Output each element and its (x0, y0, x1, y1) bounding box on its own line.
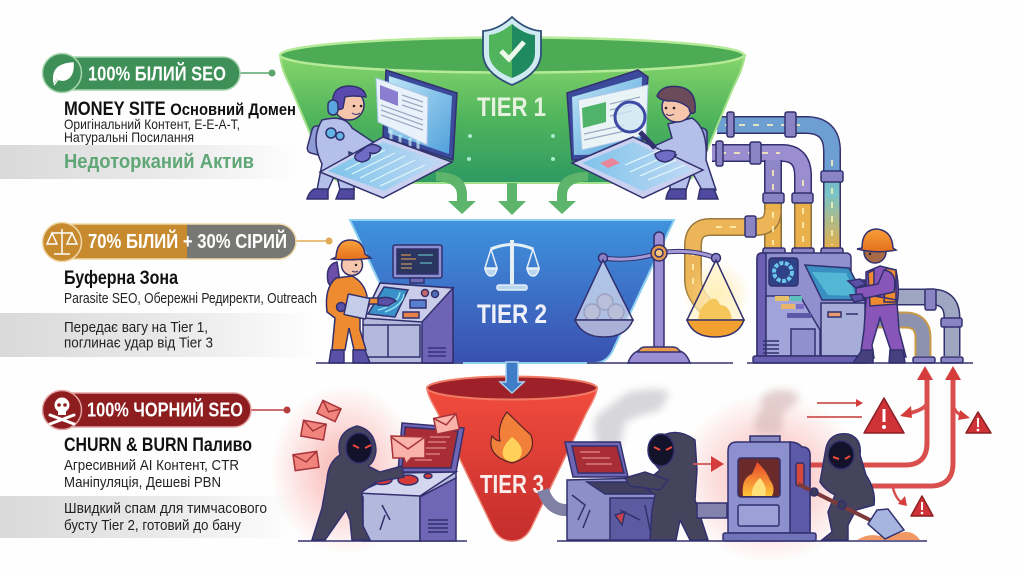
warning triangles (864, 398, 991, 516)
role tier 2: Передає вагу на Tier 1, (64, 319, 208, 336)
green flow arrows (436, 172, 588, 215)
console (363, 245, 453, 363)
untouched asset text: Недоторканий Актив (64, 151, 254, 173)
male engineer (848, 229, 906, 363)
ground lines (298, 363, 973, 541)
lower pipes from machine (878, 289, 963, 363)
furnace smoke (754, 390, 800, 435)
pipes from tier 1 to the control machine (693, 112, 843, 312)
red badge: 100% ЧОРНИЙ SEO (87, 398, 243, 422)
right astronaut hand (655, 150, 675, 162)
amber and gray badge (42, 222, 332, 262)
machine (753, 248, 868, 363)
tier 3 title: TIER 3 (480, 469, 544, 499)
tier 1 title: TIER 1 (477, 92, 546, 122)
role tier 3: Швидкий спам для тимчасового (64, 500, 267, 517)
panel: tier 3 funnel (427, 376, 597, 541)
role tier 3: бусту Tier 2, готовий до бану (64, 517, 241, 534)
blue arrow into tier 3 (500, 362, 524, 393)
shovel (798, 484, 904, 539)
gray band tier 3 (0, 496, 300, 538)
amber and gray badge: 70% БІЛИЙ + 30% СІРИЙ (88, 229, 287, 253)
heading buffer zone: Буферна Зона (64, 268, 178, 289)
description tier 3: Агресивний AI Контент, CTR (64, 457, 239, 474)
left astronaut hands (355, 144, 381, 162)
woman engineer (326, 240, 396, 363)
green badge 100% white SEO: 100% БІЛИЙ SEO (88, 62, 226, 86)
description tier 3 (64, 457, 239, 491)
icon: shield with check (483, 17, 541, 85)
description tier 1 (64, 116, 240, 145)
magnifier (615, 102, 655, 148)
tier 2 title: TIER 2 (477, 299, 547, 329)
embers (857, 531, 920, 540)
red glows (270, 385, 865, 563)
icon: small scales (485, 240, 539, 290)
red arrow heads (711, 366, 970, 506)
green badge 100% white SEO (42, 54, 276, 92)
panel: tier 2 funnel (350, 220, 674, 363)
description tier 1: Оригінальний Контент, E-E-A-T, (64, 116, 240, 132)
red badge (42, 390, 290, 430)
right laptop (567, 70, 703, 198)
broken workstation (565, 442, 667, 540)
hacker 3 (820, 434, 874, 540)
illustration: control machine with engineer (753, 229, 963, 363)
role tier 2 (64, 319, 213, 352)
spam console (357, 423, 464, 541)
red pipeline arrows (693, 374, 966, 504)
role tier 3 (64, 500, 267, 534)
panel: tier 2 label block (0, 222, 332, 357)
smoke from laptop (594, 389, 670, 455)
left laptop (320, 70, 457, 198)
large warning triangle (864, 398, 904, 433)
description tier 1: Натуральні Посилання (64, 129, 194, 145)
illustration: big balance scale (575, 232, 750, 363)
connecting pipe (697, 503, 727, 518)
illustration: hacker with burning laptop (543, 389, 708, 540)
small data sparks (467, 134, 555, 161)
description tier 2: Parasite SEO, Обережні Редиректи, Outreach (64, 290, 317, 307)
left astronaut figure (306, 86, 376, 199)
envelopes near console (391, 414, 459, 464)
icon: flame (491, 412, 532, 463)
spam envelopes flying left (293, 400, 341, 471)
gray band tier 2 (0, 313, 325, 357)
description tier 3: Маніпуляція, Дешеві PBN (64, 474, 221, 491)
hacker 1 (312, 426, 404, 540)
heading money site: MONEY SITE Основний Домен (64, 99, 296, 120)
hacker 2 (625, 432, 708, 540)
illustration: hacker with spam console (293, 400, 464, 541)
tier 2 to tier 3 flow arrow base (427, 362, 597, 541)
lower warning triangle (911, 496, 933, 516)
illustration: furnace (697, 390, 816, 541)
connecting tube (543, 490, 570, 510)
gray band tier 1 (0, 145, 305, 179)
left pan with gears (575, 260, 633, 337)
panel: tier 3 label block (0, 390, 300, 538)
panel: tier 1 funnel (280, 38, 745, 183)
illustration: engineer at control console (326, 240, 453, 363)
right warning triangle (966, 412, 991, 433)
right pan with liquid gold (687, 260, 744, 337)
right astronaut figure (650, 86, 718, 199)
illustration: hacker with shovel (798, 434, 920, 540)
role tier 2: поглинає удар від Tier 3 (64, 334, 213, 352)
heading churn and burn: CHURN & BURN Паливо (64, 435, 252, 456)
illustration: astronaut with laptop left (306, 70, 457, 199)
illustration: astronaut with laptop and magnifier right (567, 70, 718, 199)
panel: tier 1 label block (0, 54, 305, 179)
